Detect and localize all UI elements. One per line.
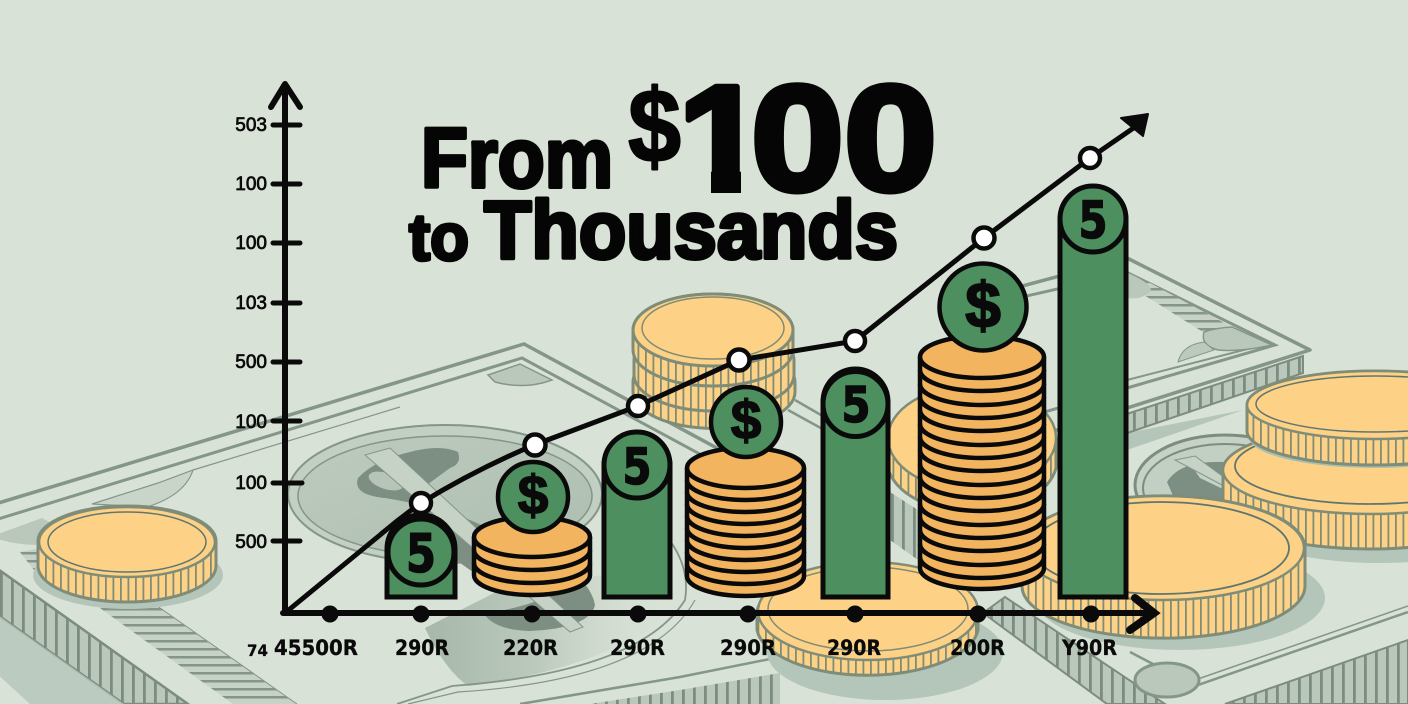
x axis labels: 74 (247, 641, 268, 660)
y axis labels: 103 (235, 293, 267, 314)
title: From (421, 111, 613, 205)
bar 5 (823, 369, 888, 597)
title: to (409, 200, 469, 274)
y axis (271, 84, 302, 613)
coin stack 4: $ (731, 389, 761, 451)
y axis labels: 100 (235, 233, 267, 254)
coin stack 2: $ (518, 464, 548, 526)
y axis labels: 100 (235, 174, 267, 195)
bar 3: 5 (622, 438, 652, 496)
y axis labels: 503 (235, 115, 267, 136)
y axis labels: 100 (235, 412, 267, 433)
title (408, 82, 934, 262)
bar 1 (387, 515, 455, 597)
x axis labels: Y90R (1061, 636, 1117, 660)
y axis labels: 500 (235, 532, 267, 553)
x axis labels: 290R (395, 636, 449, 660)
growth line with arrow (285, 114, 1148, 613)
coin stack 6 (920, 264, 1044, 589)
x axis labels (247, 636, 1117, 660)
background coin: behind stack (888, 386, 1056, 512)
bar 3 (604, 432, 670, 597)
x axis labels: 200R (950, 636, 1005, 660)
x axis labels: 290R (720, 636, 776, 660)
background coin: far right lower (1223, 408, 1408, 563)
background coin: bottom centre (757, 562, 1003, 700)
x axis labels: 290R (827, 636, 881, 660)
title: 00 (751, 54, 937, 222)
x axis labels: 45500R (274, 636, 358, 660)
background coin: left (33, 506, 223, 609)
title: 1 (678, 54, 766, 222)
background coin: far right upper (1247, 371, 1408, 465)
background: left dollar bill (0, 344, 918, 704)
background: lower right dollar bill (983, 435, 1408, 704)
coin stack 2 (474, 462, 590, 595)
background coin: large right (1022, 496, 1325, 650)
x axis labels: 220R (503, 636, 558, 660)
y axis labels: 100 (235, 473, 267, 494)
background: large dollar seal (288, 425, 602, 632)
coin stack 4 (687, 387, 804, 596)
bar 7: 5 (1078, 192, 1108, 251)
bar 5: 5 (842, 377, 870, 434)
y axis labels: 500 (235, 352, 267, 373)
y axis labels (235, 115, 267, 553)
bar 1: 5 (406, 524, 436, 585)
bar 7 (1060, 186, 1126, 597)
background coin stack: top centre (633, 294, 795, 428)
title: Thousands (484, 185, 898, 276)
background: upper right dollar bill (1000, 258, 1310, 456)
title: $ (628, 69, 681, 185)
x axis (283, 598, 1154, 630)
coin stack 6: $ (965, 269, 1001, 341)
x axis labels: 290R (610, 636, 665, 660)
